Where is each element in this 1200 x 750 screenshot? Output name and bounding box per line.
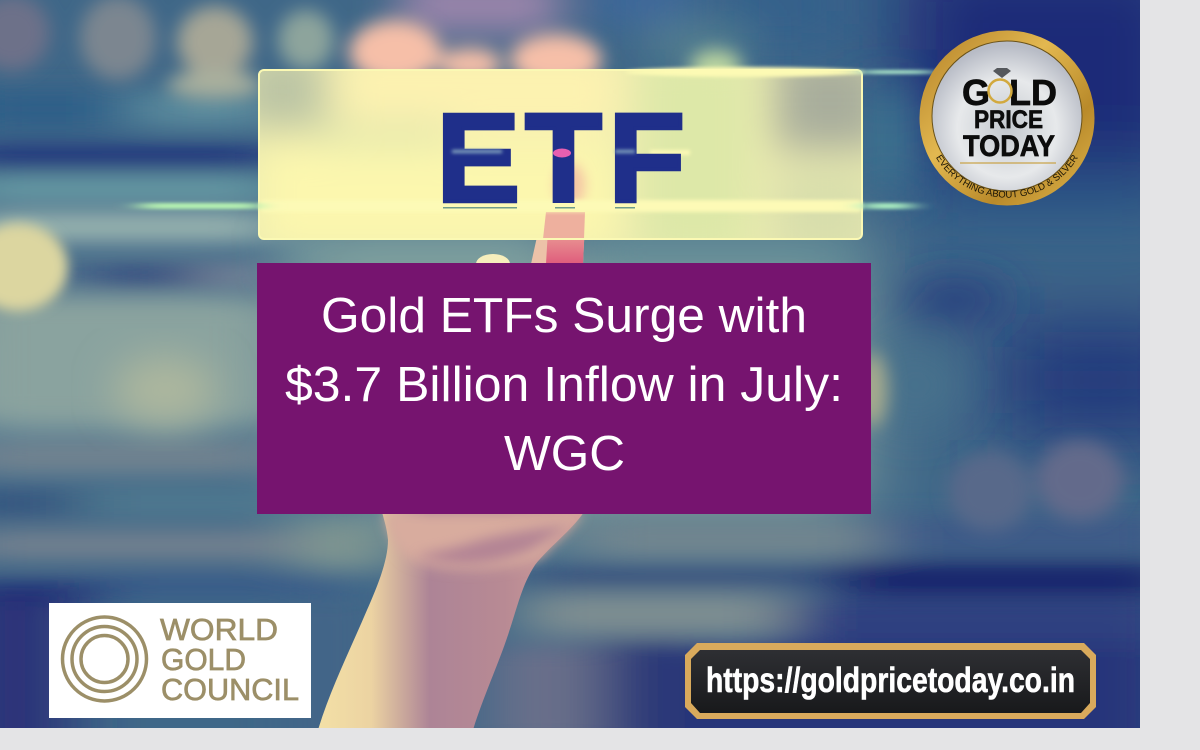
heading: ETF: F bbox=[608, 88, 685, 228]
headline text: $3.7 Billion Inflow in July: bbox=[285, 357, 843, 412]
logo: World Gold Council bbox=[49, 603, 311, 718]
wordmark: PRICE bbox=[974, 106, 1043, 134]
icon: concentric rings bbox=[62, 617, 146, 701]
wordmark: WORLD bbox=[160, 612, 278, 647]
wordmark bbox=[962, 72, 1057, 163]
logo: Gold Price Today badge bbox=[920, 30, 1094, 206]
headline text: WGC bbox=[504, 426, 625, 481]
top centre glow bbox=[280, 0, 1010, 425]
bokeh circles bbox=[0, 0, 1124, 531]
ornament divider bbox=[960, 162, 1056, 164]
website badge bbox=[685, 643, 1096, 719]
heading: ETF bbox=[436, 88, 685, 228]
panel: headline banner bbox=[257, 263, 871, 514]
icon: raised hand and arm bbox=[318, 512, 584, 730]
icon: diamond ring bbox=[988, 68, 1012, 102]
url text: https://goldpricetoday.co.in bbox=[706, 661, 1075, 700]
light streaks bbox=[140, 70, 932, 209]
headline text bbox=[285, 288, 843, 481]
wordmark: G bbox=[962, 72, 990, 113]
glow lines on button bbox=[259, 67, 865, 212]
wordmark: GOLD bbox=[161, 642, 246, 677]
headline text: Gold ETFs Surge with bbox=[321, 288, 807, 343]
panel: glass ETF button bbox=[124, 64, 935, 240]
wordmark bbox=[160, 612, 299, 707]
heading: ETF: T bbox=[525, 88, 602, 228]
palm shading bbox=[384, 513, 583, 569]
wordmark: COUNCIL bbox=[161, 672, 299, 707]
finger pointing at the button bbox=[476, 208, 585, 274]
wordmark: TODAY bbox=[963, 130, 1055, 163]
large colour zones bbox=[0, 0, 1200, 520]
tagline on curved path: EVERYTHING ABOUT GOLD & SILVER bbox=[936, 154, 1078, 198]
heading: ETF: E bbox=[436, 88, 520, 228]
wordmark: LD bbox=[1009, 72, 1057, 113]
